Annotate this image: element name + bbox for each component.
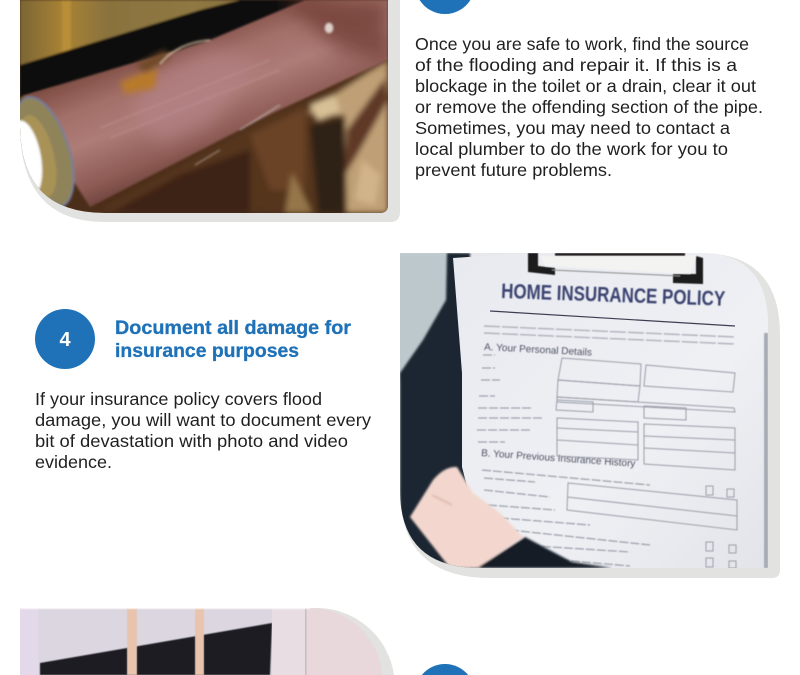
text: step 3 body: Once you are safe to work, find the source: [415, 34, 749, 54]
image: home insurance policy on clipboard with drop shadow: [395, 250, 780, 578]
hand holding the paper: [410, 467, 612, 568]
step 3 number circle: [420, 0, 470, 14]
text: step 3 body: or remove the offending section of the pipe.: [415, 97, 763, 117]
text: step 3 body: prevent future problems.: [415, 160, 612, 180]
text: step 4 body: evidence.: [35, 452, 112, 472]
text: step 4 body: If your insurance policy covers flood: [35, 389, 322, 409]
text: step 4 body: [35, 389, 371, 472]
clipboard clip: [528, 253, 703, 284]
heading: step 4: Document all damage for: [115, 318, 352, 339]
paper title: HOME INSURANCE POLICY: [501, 280, 725, 311]
text: step 3 body: blockage in the toilet or a drain, clear it out: [415, 76, 756, 96]
policy paper: B. Your Previous Insurance History: [481, 448, 636, 470]
step 4 number badge: [35, 309, 95, 369]
heading: step 4: [115, 318, 352, 362]
text: step 3 body: Sometimes, you may need to contact a: [415, 118, 730, 138]
policy paper: [453, 253, 768, 568]
text: step 3 body: of the flooding and repair it. If this is a: [415, 55, 737, 75]
text: step 4 body: bit of devastation with photo and video: [35, 431, 348, 451]
image: damaged copper pipe with drop shadow: [1, 0, 400, 222]
policy paper: A. Your Personal Details: [484, 342, 592, 359]
text: step 4 body: damage, you will want to document every: [35, 410, 371, 430]
heading: step 4: insurance purposes: [115, 341, 299, 362]
step 4 number badge: 4: [59, 329, 71, 351]
image: wall studs, bottom panel with drop shadow: [20, 604, 394, 675]
step 5 number circle: [422, 664, 468, 675]
text: step 3 body: local plumber to do the work for you to: [415, 139, 728, 159]
text: step 3 body: [415, 34, 763, 180]
